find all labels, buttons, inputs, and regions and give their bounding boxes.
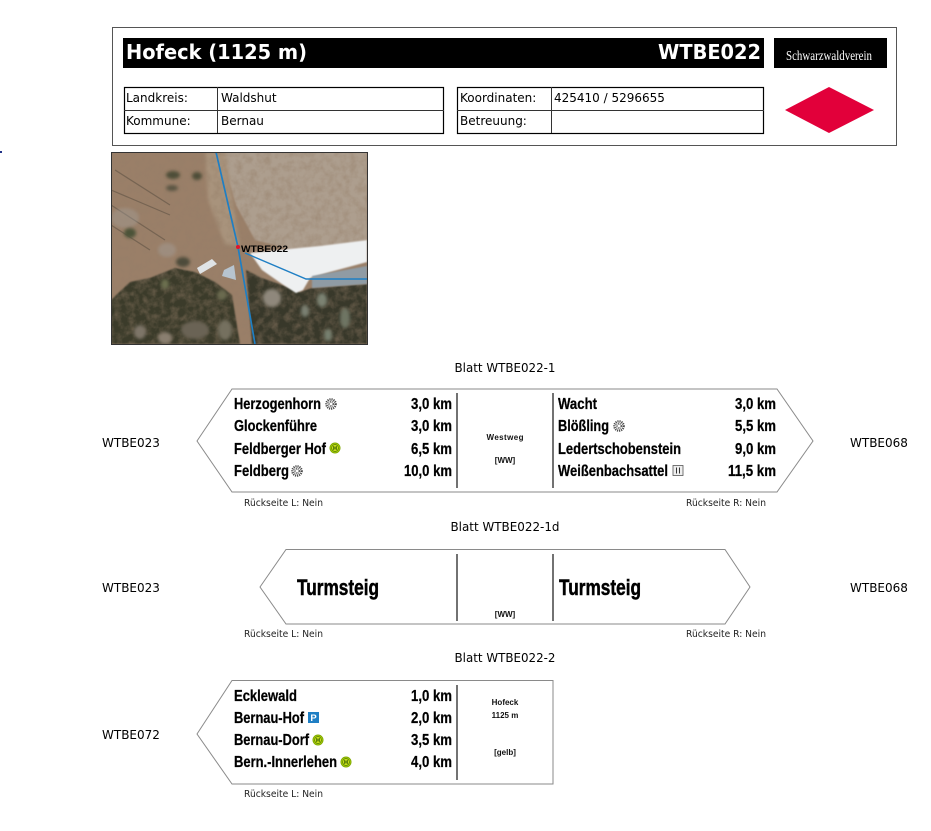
- table: district and municipality: [124, 87, 444, 134]
- title bar: Hofeck (1125 m): [126, 40, 307, 64]
- back side note left: Rückseite L: Nein: [244, 629, 323, 640]
- centre route code: [WW]: [495, 610, 516, 619]
- right destinations: Ledertschobenstein: [558, 441, 681, 458]
- waypoint marker: WTBE022: [241, 244, 288, 255]
- table: coordinates and support: Koordinaten:: [460, 91, 536, 105]
- destinations: 3,5 km: [411, 732, 452, 749]
- left destinations: 6,5 km: [411, 441, 452, 458]
- destinations: 2,0 km: [411, 710, 452, 727]
- centre location label: [gelb]: [494, 748, 516, 757]
- left neighbour label: WTBE072: [102, 728, 160, 742]
- left destinations: 10,0 km: [404, 463, 452, 480]
- heading: Blatt WTBE022-2: Blatt WTBE022-2: [454, 651, 556, 665]
- back side note right: Rückseite R: Nein: [686, 498, 766, 509]
- centre location label: [492, 698, 519, 757]
- destinations: 1,0 km: [411, 688, 452, 705]
- right destinations: [558, 396, 776, 480]
- centre location label: 1125 m: [492, 711, 518, 720]
- Schwarzwaldverein logo: Schwarzwaldverein: [786, 49, 872, 64]
- Schwarzwaldverein logo: [774, 38, 887, 68]
- destinations: Bernau-Dorf: [234, 732, 310, 749]
- right destinations: Wacht: [558, 396, 598, 413]
- table: district and municipality: Bernau: [221, 114, 264, 128]
- left destinations: Feldberg: [234, 463, 289, 480]
- centre route label: [WW]: [495, 456, 516, 465]
- sign 2: [260, 550, 750, 624]
- right destinations: 9,0 km: [735, 441, 776, 458]
- sign 1: [197, 389, 813, 492]
- centre route label: Westweg: [486, 433, 524, 442]
- waypoint marker: [236, 245, 288, 252]
- destinations: Bernau-Hof: [234, 710, 305, 727]
- left neighbour label: WTBE023: [102, 581, 160, 595]
- destinations: 4,0 km: [411, 754, 452, 771]
- title bar: WTBE022: [658, 40, 761, 64]
- title bar: [123, 38, 764, 68]
- left neighbour label: WTBE023: [102, 436, 160, 450]
- right destinations: 11,5 km: [728, 463, 776, 480]
- aerial photo map: [111, 152, 367, 344]
- icon: red diamond: [785, 87, 874, 133]
- location marker dot: [0, 151, 2, 153]
- back side note right: Rückseite R: Nein: [686, 629, 766, 640]
- right destinations: 5,5 km: [735, 418, 776, 435]
- right destinations: Blößling: [558, 418, 609, 435]
- right neighbour label: WTBE068: [850, 436, 908, 450]
- heading: Blatt WTBE022-1: Blatt WTBE022-1: [454, 361, 556, 375]
- back side note left: Rückseite L: Nein: [244, 789, 323, 800]
- sign 3: [197, 680, 553, 784]
- left route name: Turmsteig: [297, 575, 379, 600]
- table: coordinates and support: Betreuung:: [460, 114, 527, 128]
- right destinations: 3,0 km: [735, 396, 776, 413]
- table: district and municipality: Kommune:: [126, 114, 191, 128]
- header panel: [112, 28, 896, 146]
- table: coordinates and support: 425410 / 5296655: [554, 91, 665, 105]
- table: coordinates and support: [457, 87, 764, 134]
- destinations: Bern.-Innerlehen: [234, 754, 337, 771]
- left destinations: [234, 396, 452, 480]
- destinations: [234, 688, 452, 771]
- table: district and municipality: Waldshut: [221, 91, 277, 105]
- left destinations: Feldberger Hof: [234, 441, 327, 458]
- route lines: [216, 152, 367, 344]
- destinations: P: [310, 713, 317, 724]
- left destinations: Herzogenhorn: [234, 396, 321, 413]
- left destinations: 3,0 km: [411, 418, 452, 435]
- centre location label: Hofeck: [492, 698, 519, 707]
- right neighbour label: WTBE068: [850, 581, 908, 595]
- left destinations: Glockenführe: [234, 418, 317, 435]
- heading: Blatt WTBE022-1d: Blatt WTBE022-1d: [450, 520, 560, 534]
- right route name: Turmsteig: [559, 575, 641, 600]
- table: district and municipality: Landkreis:: [126, 91, 188, 105]
- left destinations: 3,0 km: [411, 396, 452, 413]
- right destinations: Weißenbachsattel: [558, 463, 668, 480]
- centre route label: [486, 433, 524, 465]
- destinations: Ecklewald: [234, 688, 297, 705]
- back side note left: Rückseite L: Nein: [244, 498, 323, 509]
